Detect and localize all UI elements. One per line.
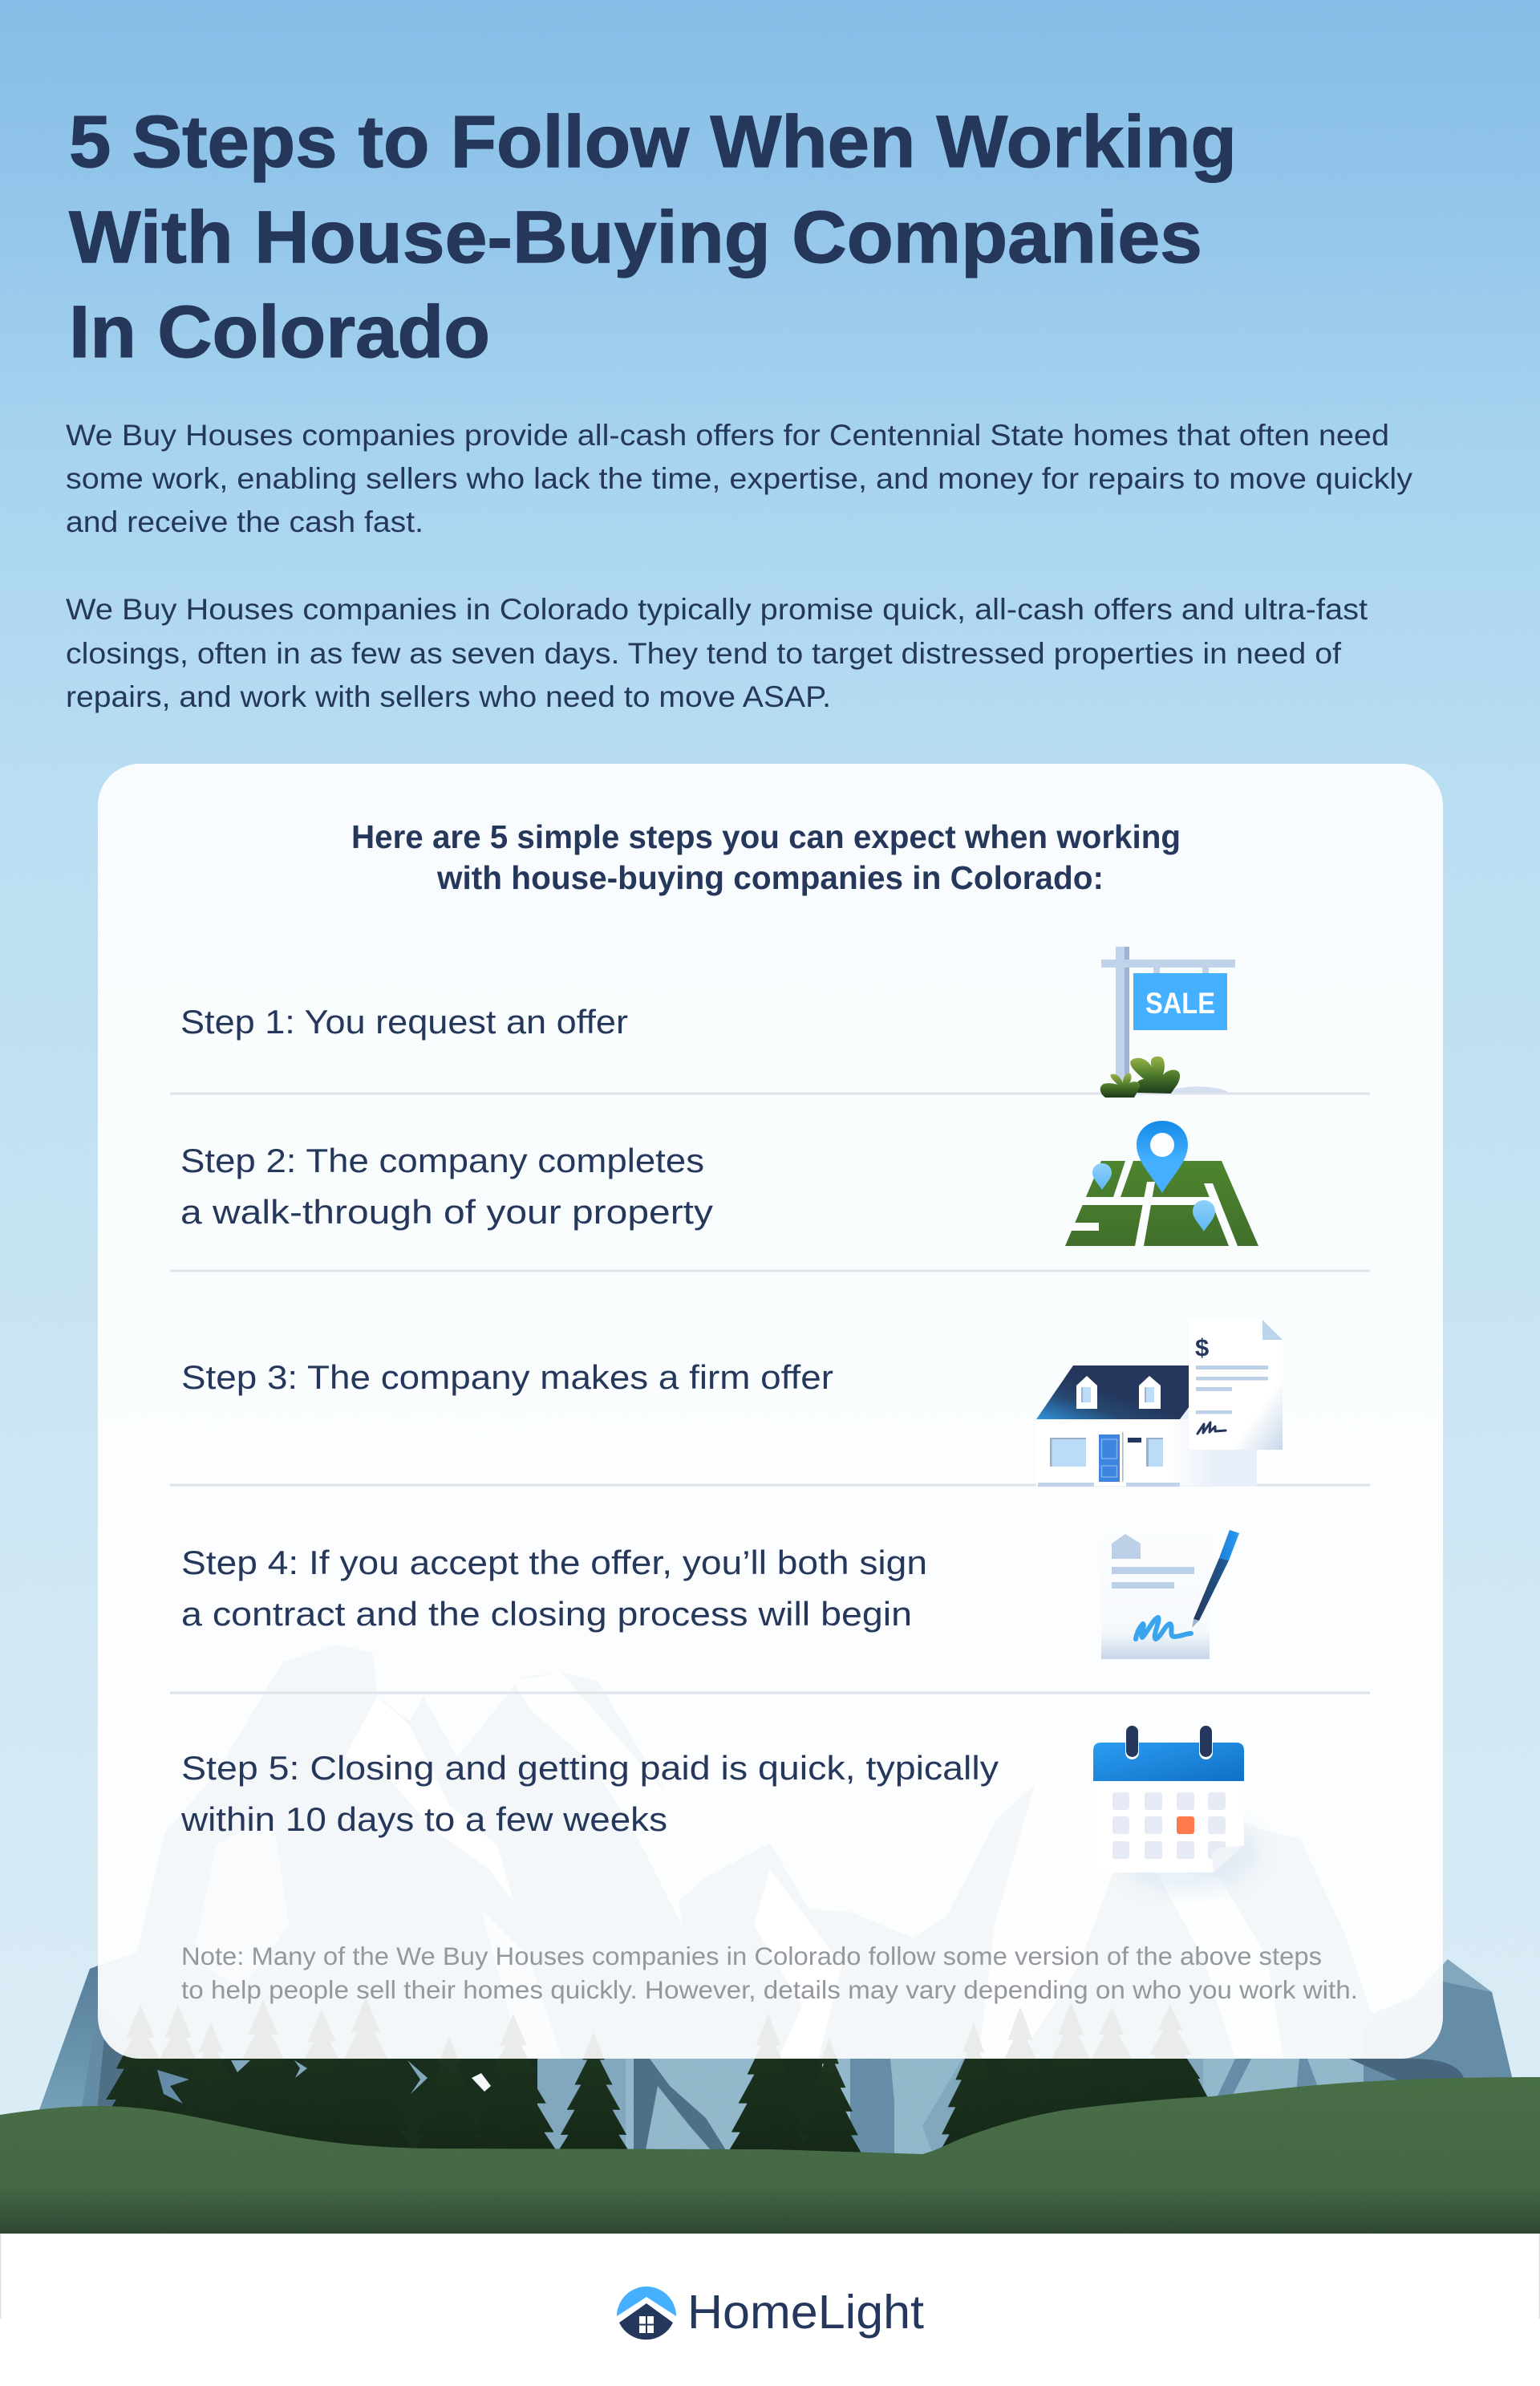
intro paragraph one: and receive the cash fast. xyxy=(66,505,424,538)
icon: calendar xyxy=(1093,1726,1259,1893)
card heading xyxy=(351,818,1181,896)
icon: map with location pins xyxy=(1065,1121,1258,1246)
step 5 text xyxy=(180,1749,999,1838)
panel: steps card xyxy=(98,764,1443,2059)
title xyxy=(69,101,1237,373)
step 5 text: Step 5: Closing and getting paid is quick, typically xyxy=(181,1749,999,1787)
card heading: Here are 5 simple steps you can expect when working xyxy=(351,818,1181,855)
intro paragraph two: repairs, and work with sellers who need to move ASAP. xyxy=(66,680,831,713)
icon: house with offer document xyxy=(1036,1320,1283,1487)
mountain range xyxy=(39,1645,1512,2166)
icon: for sale sign xyxy=(1100,947,1235,1098)
icon: for sale sign: SALE xyxy=(1145,987,1215,1020)
title: In Colorado xyxy=(69,291,490,373)
step 4 text: Step 4: If you accept the offer, you’ll both sign xyxy=(181,1544,927,1581)
step 4 text: a contract and the closing process will begin xyxy=(181,1595,912,1633)
intro paragraph two xyxy=(66,593,1368,713)
note text xyxy=(181,1942,1358,2004)
intro paragraph two: We Buy Houses companies in Colorado typically promise quick, all-cash offers and ultra-fast xyxy=(66,593,1368,626)
title: 5 Steps to Follow When Working xyxy=(69,101,1237,183)
intro paragraph two: closings, often in as few as seven days. They tend to target distressed properties in need of xyxy=(66,637,1342,670)
step 4 text xyxy=(181,1544,927,1633)
intro paragraph one xyxy=(66,419,1413,538)
rolling green hill xyxy=(0,2077,1540,2234)
step 2 text xyxy=(180,1142,713,1231)
footer logo: HomeLight: HomeLight xyxy=(687,2286,924,2339)
intro paragraph one: some work, enabling sellers who lack the time, expertise, and money for repairs to move quickly xyxy=(66,462,1413,495)
step 2 text: a walk-through of your property xyxy=(180,1193,713,1231)
note text: Note: Many of the We Buy Houses companies in Colorado follow some version of the above steps xyxy=(181,1942,1322,1970)
step 3 text: Step 3: The company makes a firm offer xyxy=(181,1358,833,1396)
step 1 text: Step 1: You request an offer xyxy=(180,1003,628,1041)
white footer band xyxy=(0,2234,1540,2386)
intro paragraph one: We Buy Houses companies provide all-cash offers for Centennial State homes that often need xyxy=(66,419,1389,452)
pine tree line xyxy=(90,1997,1223,2160)
icon: contract and pen xyxy=(1101,1520,1239,1659)
title: With House-Buying Companies xyxy=(69,197,1202,278)
step 2 text: Step 2: The company completes xyxy=(180,1142,704,1179)
card heading: with house-buying companies in Colorado: xyxy=(436,859,1104,896)
icon: house with offer document: $ xyxy=(1195,1333,1209,1361)
step 5 text: within 10 days to a few weeks xyxy=(180,1800,667,1838)
note text: to help people sell their homes quickly. However, details may vary depending on who you work with. xyxy=(181,1975,1358,2004)
